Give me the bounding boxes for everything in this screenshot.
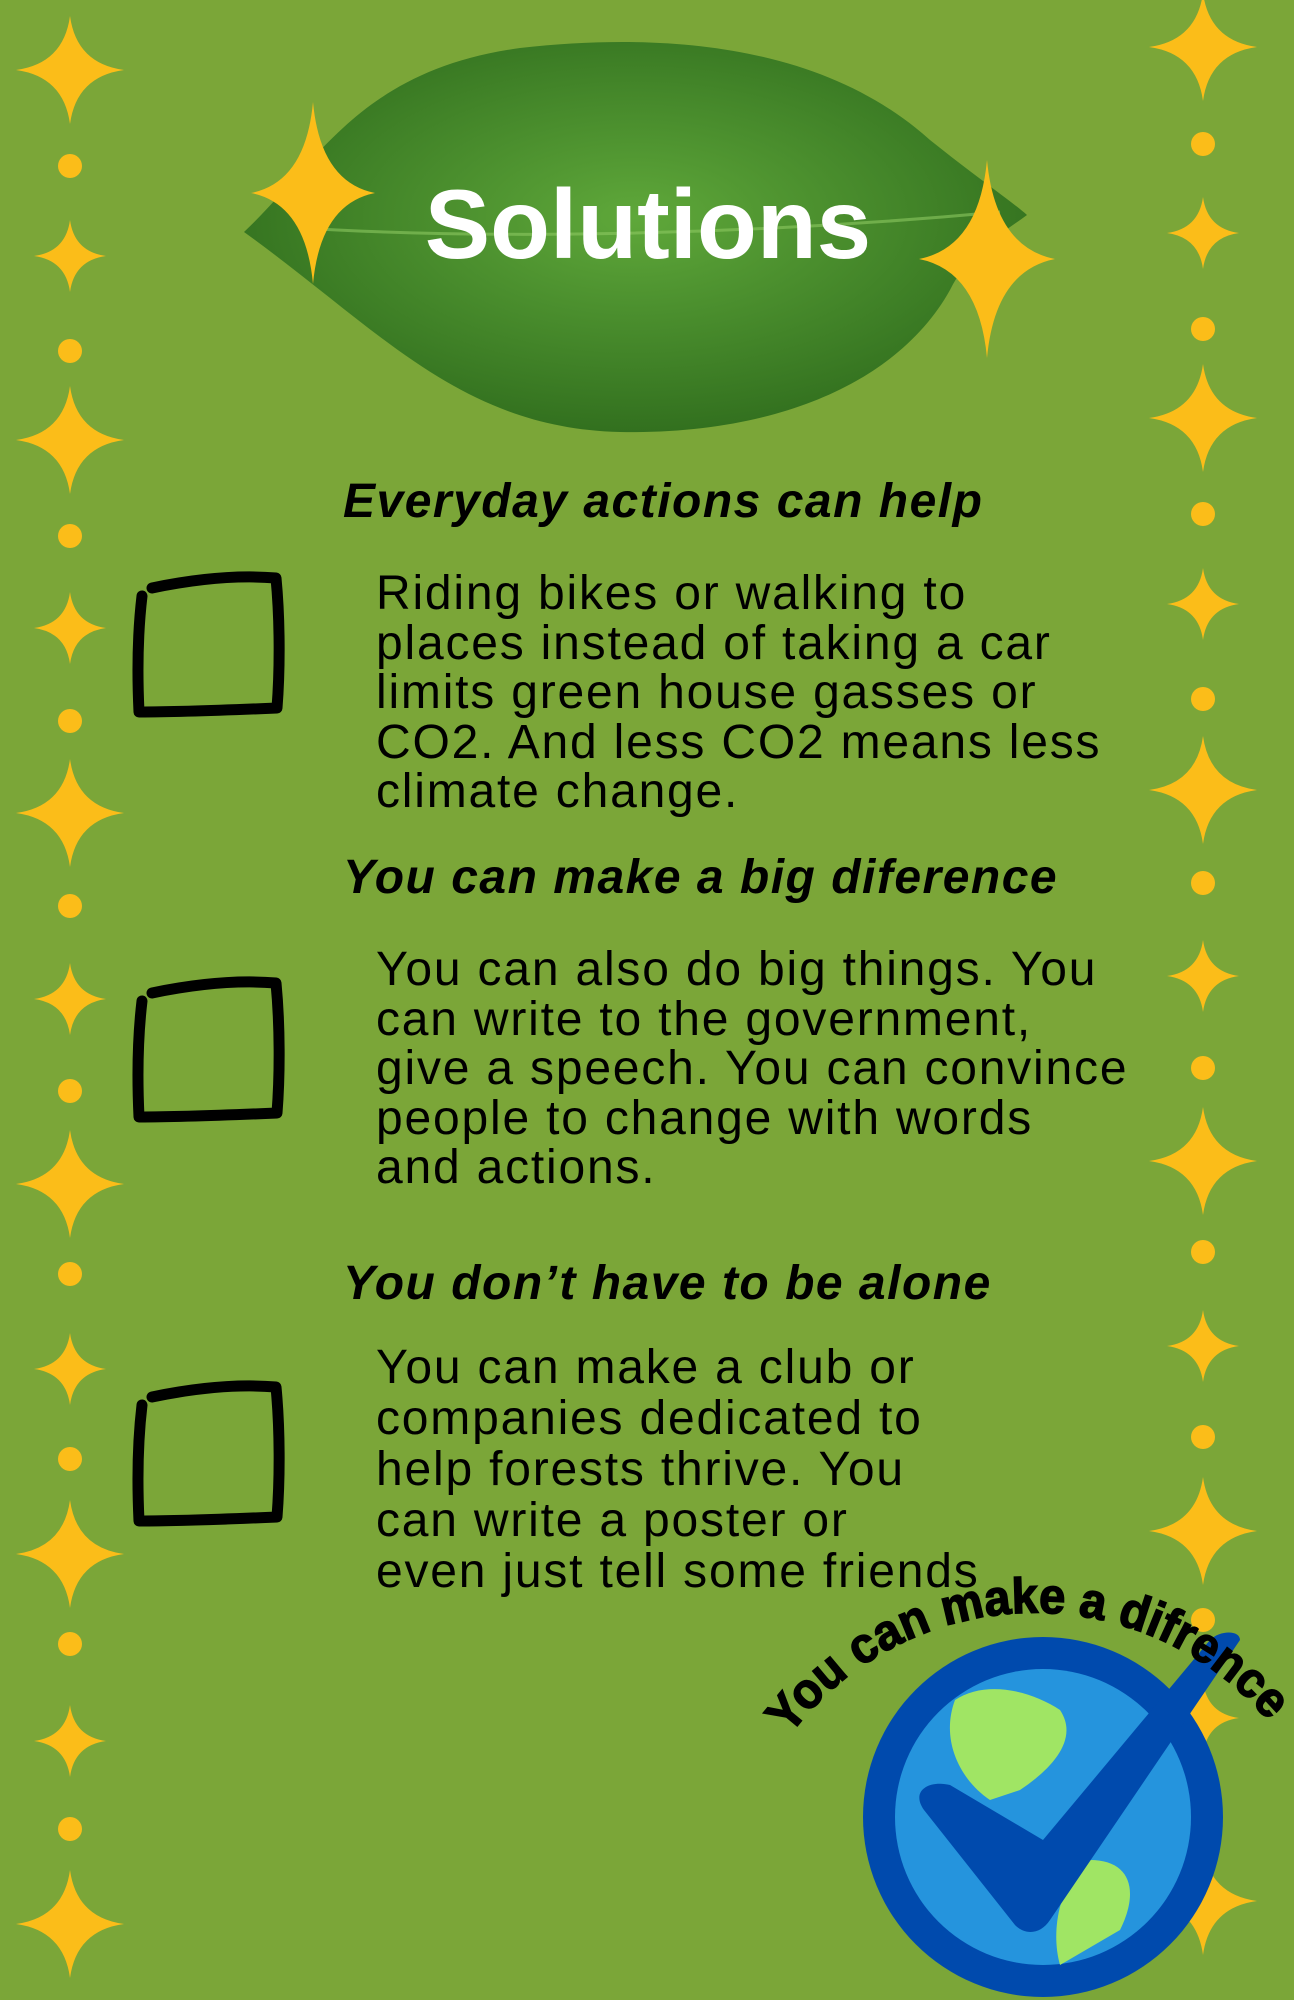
curved caption: You can make a difrence <box>762 1576 1284 1727</box>
body 3: You can make a club or <box>376 1341 915 1394</box>
body 3: can write a poster or <box>376 1494 849 1547</box>
body 1 <box>376 567 1101 818</box>
body 2 <box>376 943 1128 1194</box>
checkbox 2 <box>138 982 279 1117</box>
globe badge <box>863 1632 1240 1997</box>
heading 2: You can make a big diference <box>343 851 1058 904</box>
body 3: even just tell some friends <box>376 1545 980 1598</box>
body 1: Riding bikes or walking to <box>376 567 967 620</box>
body 1: places instead of taking a car <box>376 616 1052 670</box>
leaf <box>244 42 1027 432</box>
body 1: limits green house gasses or <box>376 666 1037 719</box>
body 3: companies dedicated to <box>376 1392 923 1445</box>
body 2: You can also do big things. You <box>376 943 1097 996</box>
heading 1: Everyday actions can help <box>343 475 983 528</box>
body 3 <box>376 1341 980 1598</box>
body 2: give a speech. You can convince <box>376 1042 1128 1095</box>
body 1: climate change. <box>376 765 739 818</box>
body 2: can write to the government, <box>376 992 1032 1046</box>
left star column <box>16 16 124 1978</box>
leaf sparkle stars <box>251 102 1055 358</box>
heading 3: You don’t have to be alone <box>343 1257 992 1310</box>
checkbox 1 <box>138 577 279 712</box>
body 2: people to change with words <box>376 1092 1033 1144</box>
right star column <box>1149 0 1257 1955</box>
body 1: CO2. And less CO2 means less <box>376 716 1101 768</box>
body 3: help forests thrive. You <box>376 1443 905 1496</box>
checkbox 3 <box>138 1386 279 1521</box>
body 2: and actions. <box>376 1141 656 1194</box>
title: Solutions <box>425 169 871 279</box>
